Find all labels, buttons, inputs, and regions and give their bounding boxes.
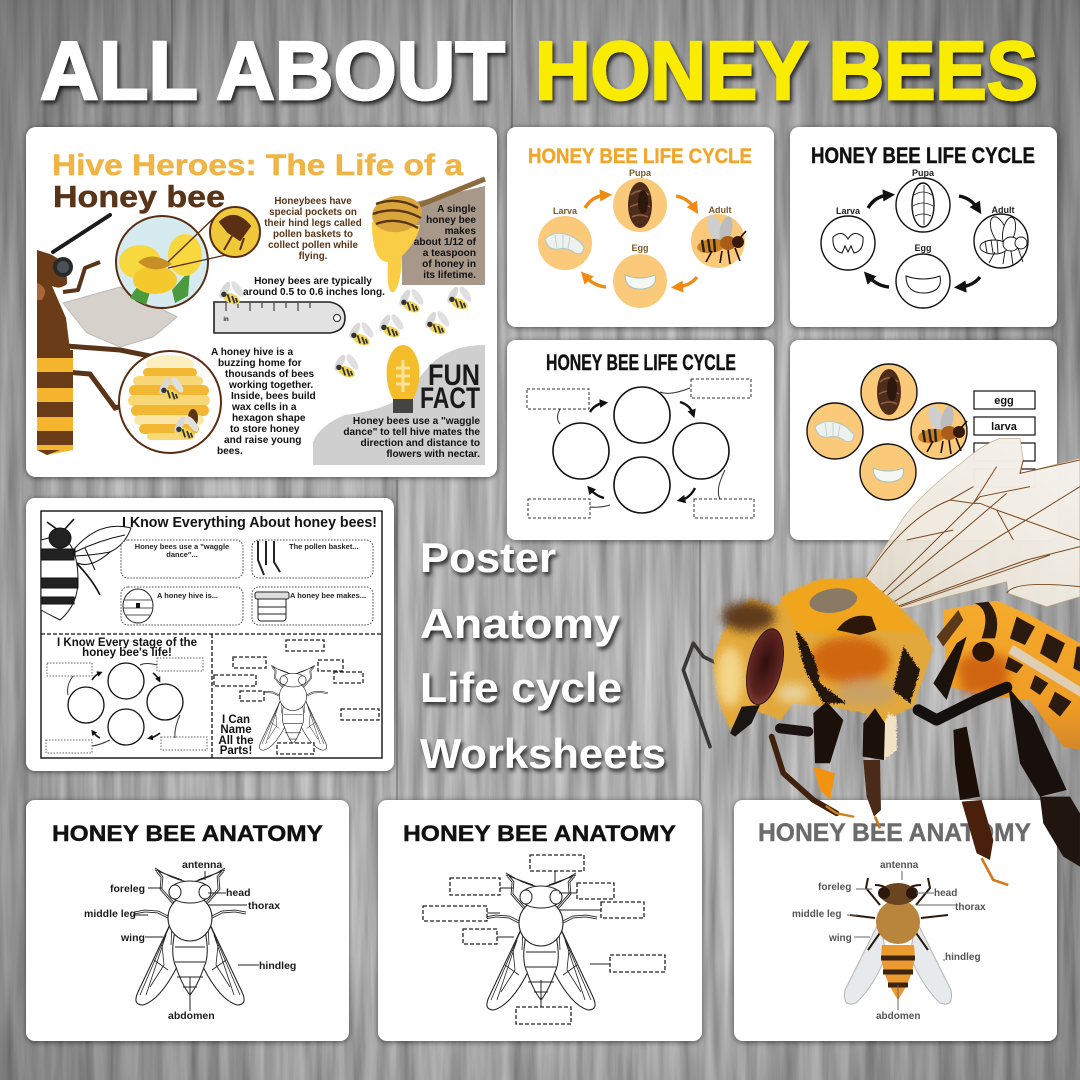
heading: HONEY BEE ANATOMY [52, 821, 323, 846]
panel: color life cycle [507, 127, 774, 327]
part labels: antenna [182, 859, 222, 871]
icons: flying bees [332, 284, 474, 380]
text: pollen pockets: collect pollen while [268, 240, 358, 251]
leader lines [133, 871, 259, 1011]
text list: resource types [420, 534, 666, 777]
prompt: waggle dance [121, 540, 243, 578]
rear middle leg [953, 727, 1008, 885]
panel: fun fact [313, 345, 485, 465]
panel: fun fact: FUN [428, 359, 480, 392]
title: All About Honey Bees: ALL ABOUT [40, 24, 505, 117]
prompt: honey jar [252, 587, 373, 625]
icon: ruler: in [223, 317, 229, 323]
worksheet heading: I Know Everything About honey bees! [122, 515, 377, 531]
word boxes: larva [991, 421, 1018, 433]
poster heading: Hive Heroes: The Life of a [52, 149, 463, 182]
honey fact box: honey bee [426, 215, 476, 226]
empty stage circles [553, 387, 729, 513]
mandibles [730, 705, 760, 737]
wings [867, 438, 1080, 617]
panel: fun fact: Honey bees use a "waggle [353, 416, 480, 427]
middle leg [863, 708, 885, 828]
section heading: life stages: I Know Every stage of the [57, 637, 197, 649]
text: honey hive [211, 347, 316, 457]
front leg [813, 702, 843, 800]
heading: HONEY BEE LIFE CYCLE [528, 145, 752, 168]
panel: labeled anatomy diagram [26, 800, 349, 1041]
panel: cut and paste life cycle [790, 340, 1057, 540]
text: honey hive: Inside, bees build [231, 391, 316, 402]
illustration: beehive lens [119, 351, 221, 453]
honey fact box: A single [437, 204, 476, 215]
mini anatomy diagram [214, 640, 379, 754]
part labels: wing [120, 932, 145, 944]
stage labels: Egg [632, 243, 648, 253]
illustration: big cartoon bee [37, 215, 177, 455]
cycle arrows [868, 195, 980, 287]
word boxes: egg [994, 395, 1014, 407]
part labels: abdomen [876, 1011, 920, 1022]
text list: resource types: Life cycle [420, 664, 622, 711]
honey fact box: its lifetime. [423, 270, 476, 281]
panel: all about worksheet [26, 498, 394, 771]
panel: fun fact: dance" to tell hive mates the [343, 427, 480, 438]
label boxes [527, 379, 754, 518]
honey fact box [370, 179, 485, 292]
text: bee length: Honey bees are typically [254, 276, 372, 287]
title: All About Honey Bees [40, 24, 1038, 117]
panel: blank anatomy diagram [378, 800, 702, 1041]
text: honey hive: A honey hive is a [211, 347, 293, 358]
leader lines [847, 871, 955, 1010]
text: pollen pockets [264, 196, 362, 262]
text: honey hive: and raise young [224, 435, 301, 446]
stage labels: Egg [914, 243, 932, 253]
text list: resource types: Worksheets [420, 730, 666, 777]
panel: blank life cycle worksheet [507, 340, 774, 540]
text: name the parts: Name [220, 724, 252, 736]
near hind leg [918, 610, 1080, 867]
part labels: head [934, 888, 957, 899]
part labels: abdomen [168, 1010, 215, 1022]
text list: resource types: Anatomy [420, 600, 621, 647]
part labels: thorax [248, 900, 280, 912]
prompt: honey jar: A honey bee makes... [290, 591, 366, 600]
heading: HONEY BEE ANATOMY [758, 819, 1031, 847]
prompt: waggle dance: Honey bees use a "waggle [135, 542, 229, 551]
prompt: honey hive [121, 587, 243, 625]
panel: fun fact: direction and distance to [361, 438, 480, 449]
stage labels: Adult [708, 205, 732, 215]
text: pollen pockets: Honeybees have [274, 196, 352, 207]
honey fact box: makes [445, 226, 476, 237]
part labels: foreleg [110, 883, 145, 895]
text: honey hive: wax cells in a [231, 402, 297, 413]
stage labels [553, 168, 732, 253]
prompt: pollen basket: The pollen basket... [289, 542, 359, 551]
text: name the parts: I Can [222, 714, 250, 726]
text: pollen pockets: pollen baskets to [273, 229, 353, 240]
title: All About Honey Bees: HONEY BEES [535, 24, 1038, 117]
panel: color anatomy diagram [734, 800, 1057, 1041]
prompt: honey hive: A honey hive is... [157, 591, 218, 600]
stage labels: Adult [992, 205, 1014, 215]
illustration: flower lens [116, 207, 260, 308]
text: honey hive: bees. [217, 446, 243, 457]
icon: ruler [214, 279, 345, 333]
stage labels [836, 168, 1014, 253]
illustration: large realistic honey bee [683, 438, 1080, 885]
blank label boxes [423, 855, 665, 1024]
heading: HONEY BEE LIFE CYCLE [546, 350, 736, 375]
illustration: black and white bee [41, 519, 131, 620]
part labels: hindleg [945, 952, 981, 963]
section heading: life stages: honey bee's life! [82, 647, 172, 659]
bee outline [134, 868, 246, 1005]
part labels [792, 860, 986, 1022]
section heading: life stages [57, 637, 197, 659]
honey fact box: of honey in [422, 259, 476, 270]
stage labels: Larva [836, 206, 861, 216]
panel: poster Hive Heroes [26, 127, 497, 477]
text: honey hive: hexagon shape [232, 413, 306, 424]
honey fact box: a teaspoon [423, 248, 476, 259]
text: name the parts: Parts! [220, 745, 252, 757]
panel: fun fact: flowers with nectar. [386, 449, 480, 460]
antenna [683, 643, 733, 747]
text: name the parts: All the [218, 735, 254, 747]
part labels: hindleg [259, 960, 296, 972]
text: pollen pockets: flying. [299, 251, 328, 262]
cycle arrows [590, 402, 695, 500]
stage labels: Larva [553, 206, 578, 216]
compound eye [740, 625, 790, 708]
text: pollen pockets: their hind legs called [264, 218, 362, 229]
stage labels: Pupa [912, 168, 935, 178]
color bee [844, 878, 952, 1004]
text: honey hive: working together. [228, 380, 313, 391]
stage labels: Pupa [629, 168, 652, 178]
text: bee length [243, 276, 385, 298]
head and thorax fur [713, 578, 933, 760]
honey fact box: about 1/12 of [414, 237, 477, 248]
section dividers [41, 634, 382, 758]
mini life cycle [46, 658, 207, 753]
text: honey hive: thousands of bees [225, 369, 315, 380]
heading: HONEY BEE LIFE CYCLE [811, 143, 1035, 168]
stage circles [538, 178, 746, 308]
word boxes [974, 391, 1035, 487]
text: honey hive: buzzing home for [218, 358, 302, 369]
bee outline [485, 873, 597, 1010]
cycle arrows [585, 195, 697, 287]
heading: HONEY BEE ANATOMY [403, 821, 676, 846]
part labels: thorax [955, 902, 986, 913]
part labels: middle leg [84, 908, 136, 920]
far front leg [772, 728, 853, 817]
part labels: middle leg [792, 909, 841, 920]
text list: resource types: Poster [420, 534, 556, 581]
text: honey hive: to store honey [230, 424, 300, 435]
part labels: wing [828, 933, 852, 944]
wing base [837, 616, 877, 635]
prompt: pollen basket [252, 540, 373, 578]
panel: outline life cycle [790, 127, 1057, 327]
part labels: foreleg [818, 882, 851, 893]
part labels: head [226, 887, 251, 899]
text: name the parts [218, 714, 254, 757]
part labels: antenna [880, 860, 919, 871]
poster subheading: Honey bee [53, 179, 225, 214]
panel: fun fact: FACT [420, 382, 480, 415]
text: pollen pockets: special pockets on [269, 207, 357, 218]
grey thorax patch [808, 585, 859, 616]
part labels [84, 859, 296, 1022]
stage circles [821, 178, 1028, 308]
text: bee length: around 0.5 to 0.6 inches long. [243, 287, 385, 298]
prompt: waggle dance: dance"... [166, 550, 198, 559]
stage images [815, 369, 967, 482]
abdomen [943, 601, 1080, 750]
stage circles [807, 364, 967, 500]
